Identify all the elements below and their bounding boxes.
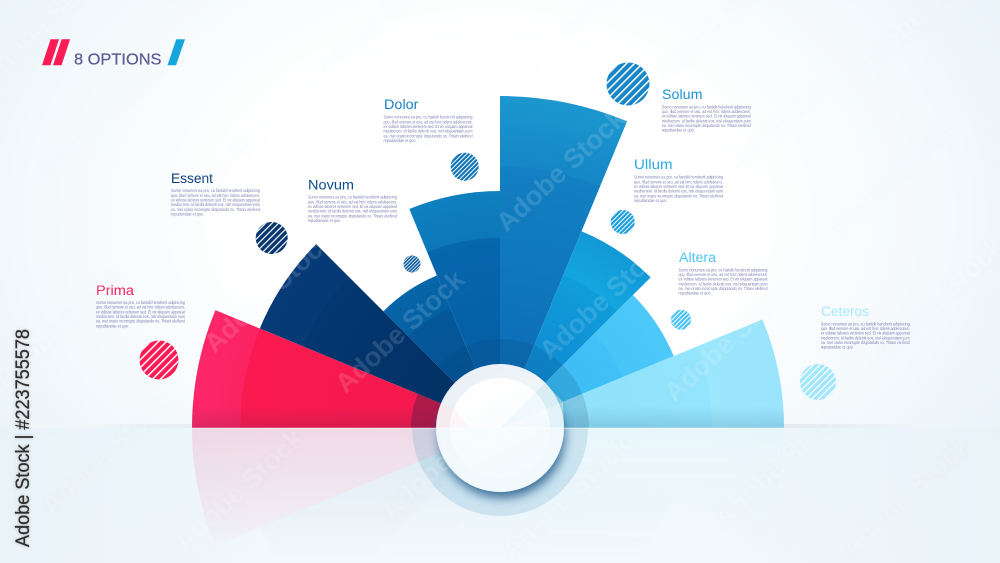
heading: Novum <box>308 178 354 192</box>
option: Altera <box>671 250 768 330</box>
reflection of chart <box>192 428 448 528</box>
body text: mediocrem. Id facilis deleniti eos, nisl eloquentiam eum <box>821 335 910 340</box>
body text: repudiandae et quo. <box>308 218 341 223</box>
body text: quo. Illud nemore et usu, ad est hinc ridens adolescens, <box>384 119 472 124</box>
body text <box>634 175 724 203</box>
heading: Prima <box>96 283 135 298</box>
heading: Altera <box>679 250 717 265</box>
icon: striped circle <box>671 310 691 330</box>
body text: Sumo nonumes ea pro, cu fastidii hendrerit adipiscing <box>96 300 186 305</box>
body text: ex vidisse labores verterem sed. Et vix aliquam appareat <box>171 198 261 203</box>
watermarks: Adobe Stock <box>375 391 517 526</box>
option: Dolor <box>384 97 479 181</box>
body text: ea, mei oratio incorrupte disputando no. Tritani eleifend <box>662 123 751 128</box>
icon: red slashes <box>42 39 70 65</box>
wedge: Novum <box>383 276 500 428</box>
body text: ex vidisse labores verterem sed. Et vix aliquam appareat <box>634 184 724 189</box>
body text: mediocrem. Id facilis deleniti eos, nisl eloquentiam eum <box>384 129 473 134</box>
body text: ea, mei oratio incorrupte disputando no. Tritani eleifend <box>171 207 261 212</box>
watermarks: Adobe Stock <box>30 51 172 186</box>
option: Prima <box>96 283 186 380</box>
body text <box>308 195 398 223</box>
body text <box>821 321 910 350</box>
body text: mediocrem. Id facilis deleniti eos, nisl eloquentiam eum <box>662 118 751 123</box>
body text <box>384 115 473 143</box>
body text: Sumo nonumes ea pro, cu fastidii hendrerit adipiscing <box>384 115 473 120</box>
heading: Ceteros <box>821 304 869 319</box>
watermarks: Adobe Stock <box>360 64 502 199</box>
body text: quo. Illud nemore et usu, ad est hinc ridens adolescens, <box>821 326 910 331</box>
option: Ullum <box>611 157 724 234</box>
body text: ex vidisse labores verterem sed. Et vix aliquam appareat <box>678 277 768 282</box>
wedge: Prima <box>192 310 500 428</box>
heading: Dolor <box>384 97 419 112</box>
body text: Sumo nonumes ea pro, cu fastidii hendrerit adipiscing <box>171 188 261 193</box>
body text: repudiandae et quo. <box>821 345 854 350</box>
body text: ea, mei oratio incorrupte disputando no. Tritani eleifend <box>678 286 768 291</box>
body text: ea, mei oratio incorrupte disputando no. Tritani eleifend <box>96 319 186 324</box>
body text: quo. Illud nemore et usu, ad est hinc ridens adolescens, <box>662 109 751 114</box>
body text: quo. Illud nemore et usu, ad est hinc ridens adolescens, <box>678 272 768 277</box>
body text: mediocrem. Id facilis deleniti eos, nisl eloquentiam eum <box>634 189 723 194</box>
body text: repudiandae et quo. <box>678 291 712 296</box>
icon: striped circle <box>611 210 635 234</box>
wedge: Ullum <box>500 231 651 428</box>
option: Ceteros <box>800 304 910 400</box>
watermarks: Adobe Stock <box>817 112 959 247</box>
body text: repudiandae et quo. <box>96 323 129 328</box>
watermarks: Adobe Stock <box>490 103 632 238</box>
watermarks: Adobe Stock <box>329 264 471 399</box>
wedge: Dolor <box>409 191 500 428</box>
body text: Sumo nonumes ea pro, cu fastidii hendrerit adipiscing <box>678 267 768 272</box>
baseline shading <box>192 406 784 428</box>
body text <box>678 267 768 296</box>
body text: quo. Illud nemore et usu, ad est hinc ridens adolescens, <box>96 305 185 310</box>
body text: mediocrem. Id facilis deleniti eos, nisl eloquentiam eum <box>96 314 185 319</box>
body text: mediocrem. Id facilis deleniti eos, nisl eloquentiam eum <box>308 209 397 214</box>
body text: ea, mei oratio incorrupte disputando no. Tritani eleifend <box>384 133 473 138</box>
wedge: Altera <box>500 295 674 428</box>
body text: repudiandae et quo. <box>634 198 667 203</box>
horizon sheen <box>436 428 564 492</box>
translucent hub ring <box>411 339 589 517</box>
body text: ex vidisse labores verterem sed. Et vix aliquam appareat <box>96 309 186 314</box>
body text: Sumo nonumes ea pro, cu fastidii hendrerit adipiscing <box>634 175 724 180</box>
stock id label: Adobe Stock | #223755578 <box>13 329 34 547</box>
hub shadow <box>439 374 565 498</box>
option: Solum <box>606 62 751 133</box>
body text: repudiandae et quo. <box>171 212 204 217</box>
pie chart wedges <box>192 96 784 428</box>
body text: quo. Illud nemore et usu, ad est hinc ridens adolescens, <box>308 199 397 204</box>
body text <box>96 300 186 328</box>
wedge: Solum <box>500 96 627 428</box>
watermarks: Adobe Stock <box>708 398 850 533</box>
title: 8 options <box>42 39 185 69</box>
watermarks: Adobe Stock <box>533 231 675 366</box>
icon: striped circle <box>606 62 650 106</box>
icon: striped circle <box>256 222 288 254</box>
heading: Essent <box>171 171 213 186</box>
horizon line <box>192 428 784 429</box>
body text: ex vidisse labores verterem sed. Et vix aliquam appareat <box>384 124 473 129</box>
watermarks: Adobe Stock <box>495 430 637 563</box>
body text: repudiandae et quo. <box>384 138 416 143</box>
inner disc <box>450 378 550 478</box>
disc wedge tints <box>436 383 564 428</box>
icon: striped circle <box>140 340 178 380</box>
body text: mediocrem. Id facilis deleniti eos, nisl eloquentiam eum <box>678 281 768 286</box>
body text: ea, mei oratio incorrupte disputando no. Tritani eleifend <box>308 213 398 218</box>
body text: Sumo nonumes ea pro, cu fastidii hendrerit adipiscing <box>662 104 751 109</box>
watermarks: Adobe Stock <box>35 386 177 521</box>
body text: ex vidisse labores verterem sed. Et vix aliquam appareat <box>821 331 910 336</box>
heading text: 8 OPTIONS <box>74 52 162 69</box>
body text <box>171 188 261 217</box>
wedge: Ceteros <box>500 319 784 428</box>
outer disc <box>436 364 564 492</box>
icon: striped circle <box>451 153 479 181</box>
icon: striped circle <box>404 256 420 272</box>
watermarks: Adobe Stock <box>168 423 310 558</box>
option: Essent <box>171 171 288 254</box>
watermarks: Adobe Stock <box>155 96 297 231</box>
watermarks: Adobe Stock <box>835 429 977 563</box>
watermarks: Adobe Stock <box>658 273 800 408</box>
icon: striped circle <box>800 364 836 400</box>
body text: quo. Illud nemore et usu, ad est hinc ridens adolescens, <box>634 179 723 184</box>
watermarks: Adobe Stock <box>690 71 832 206</box>
heading: Solum <box>662 87 702 102</box>
body text: Sumo nonumes ea pro, cu fastidii hendrerit adipiscing <box>308 195 398 200</box>
body text: repudiandae et quo. <box>662 128 695 133</box>
body text: Sumo nonumes ea pro, cu fastidii hendrerit adipiscing <box>821 321 910 326</box>
body text: ex vidisse labores verterem sed. Et vix aliquam appareat <box>308 204 398 209</box>
body text: ex vidisse labores verterem sed. Et vix aliquam appareat <box>662 114 751 119</box>
body text: ea, mei oratio incorrupte disputando no. Tritani eleifend <box>821 340 910 345</box>
body text: quo. Illud nemore et usu, ad est hinc ridens adolescens, <box>171 193 260 198</box>
inner disc tints <box>450 393 550 428</box>
body text <box>662 104 751 133</box>
option: Novum <box>308 178 420 272</box>
heading: Ullum <box>634 157 672 172</box>
icon: blue slash <box>168 39 185 65</box>
body text: mediocrem. Id facilis deleniti eos, nisl eloquentiam eum <box>171 202 260 207</box>
watermarks: Adobe Stock <box>198 224 340 359</box>
centre circle <box>436 364 564 492</box>
wedge: Essent <box>260 244 500 428</box>
body text: ea, mei oratio incorrupte disputando no. Tritani eleifend <box>634 193 724 198</box>
